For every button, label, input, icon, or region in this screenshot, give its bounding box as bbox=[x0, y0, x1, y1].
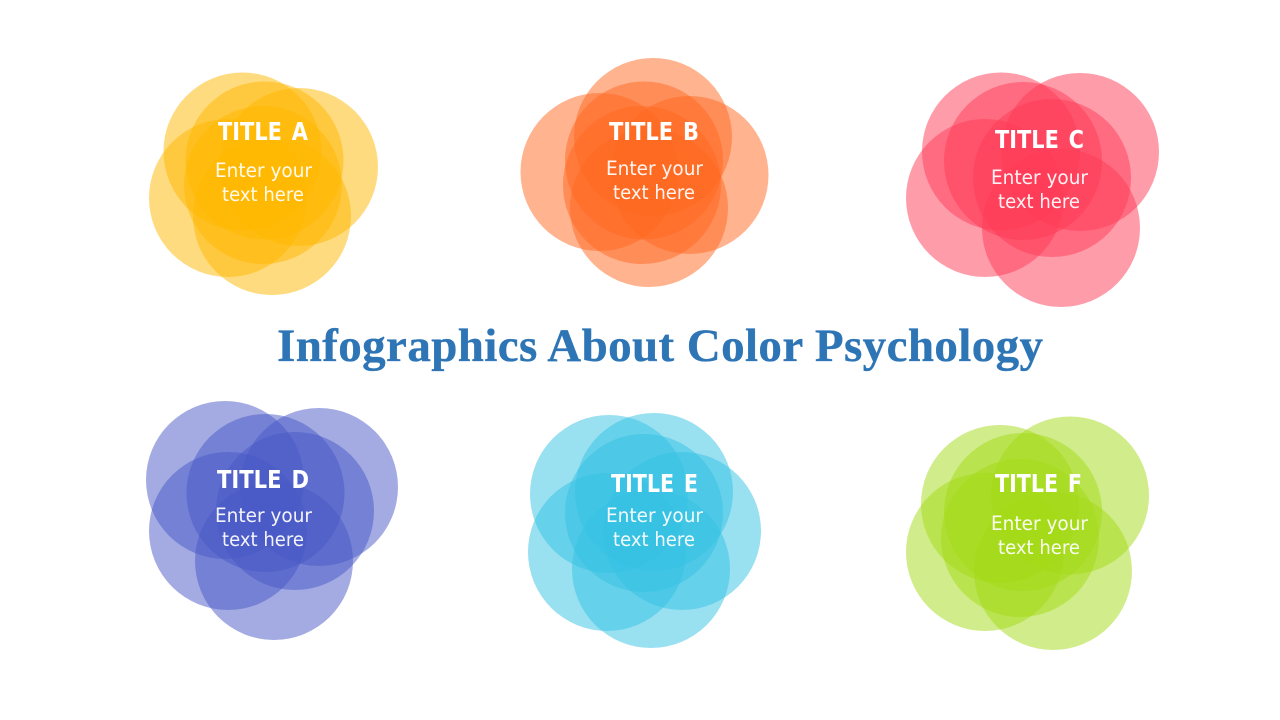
text block: title C body bbox=[991, 166, 1089, 213]
overlapping cyan circles bbox=[528, 413, 761, 648]
heading: title B: TITLE B bbox=[609, 117, 699, 146]
overlapping lime circles bbox=[906, 416, 1149, 650]
heading: title C: TITLE C bbox=[995, 125, 1084, 154]
text block: title C body: Enter your bbox=[991, 166, 1089, 189]
panel: title C cluster bbox=[906, 72, 1159, 307]
text block: title A body: text here bbox=[222, 183, 304, 206]
text block: title B body: Enter your bbox=[606, 157, 704, 180]
overlapping red circles bbox=[906, 72, 1159, 307]
text block: title A body: Enter your bbox=[215, 159, 313, 182]
panel: title B cluster bbox=[520, 58, 768, 287]
heading: title F: TITLE F bbox=[995, 469, 1082, 498]
text block: title D body: Enter your bbox=[215, 504, 313, 527]
panel: title E cluster bbox=[528, 413, 761, 648]
text block: title E body: text here bbox=[613, 528, 695, 551]
heading: title D: TITLE D bbox=[217, 465, 309, 494]
text block: title B body: text here bbox=[613, 181, 695, 204]
text block: title E body bbox=[606, 504, 704, 551]
heading: title E: TITLE E bbox=[611, 469, 698, 498]
overlapping indigo circles bbox=[146, 401, 398, 640]
overlapping yellow circles bbox=[149, 72, 378, 295]
text block: title E body: Enter your bbox=[606, 504, 704, 527]
overlapping orange circles bbox=[520, 58, 768, 287]
panel: title F cluster bbox=[906, 416, 1149, 650]
heading: title A: TITLE A bbox=[218, 117, 308, 146]
heading: main title: Infographics About Color Psychology bbox=[277, 320, 1044, 372]
text block: title B body bbox=[606, 157, 704, 204]
text block: title F body: text here bbox=[998, 536, 1080, 559]
panel: title D cluster bbox=[146, 401, 398, 640]
text block: title D body: text here bbox=[222, 528, 304, 551]
panel: title A cluster bbox=[149, 72, 378, 295]
text block: title F body bbox=[991, 512, 1089, 559]
text block: title D body bbox=[215, 504, 313, 551]
text block: title A body bbox=[215, 159, 313, 206]
text block: title C body: text here bbox=[998, 190, 1080, 213]
text block: title F body: Enter your bbox=[991, 512, 1089, 535]
